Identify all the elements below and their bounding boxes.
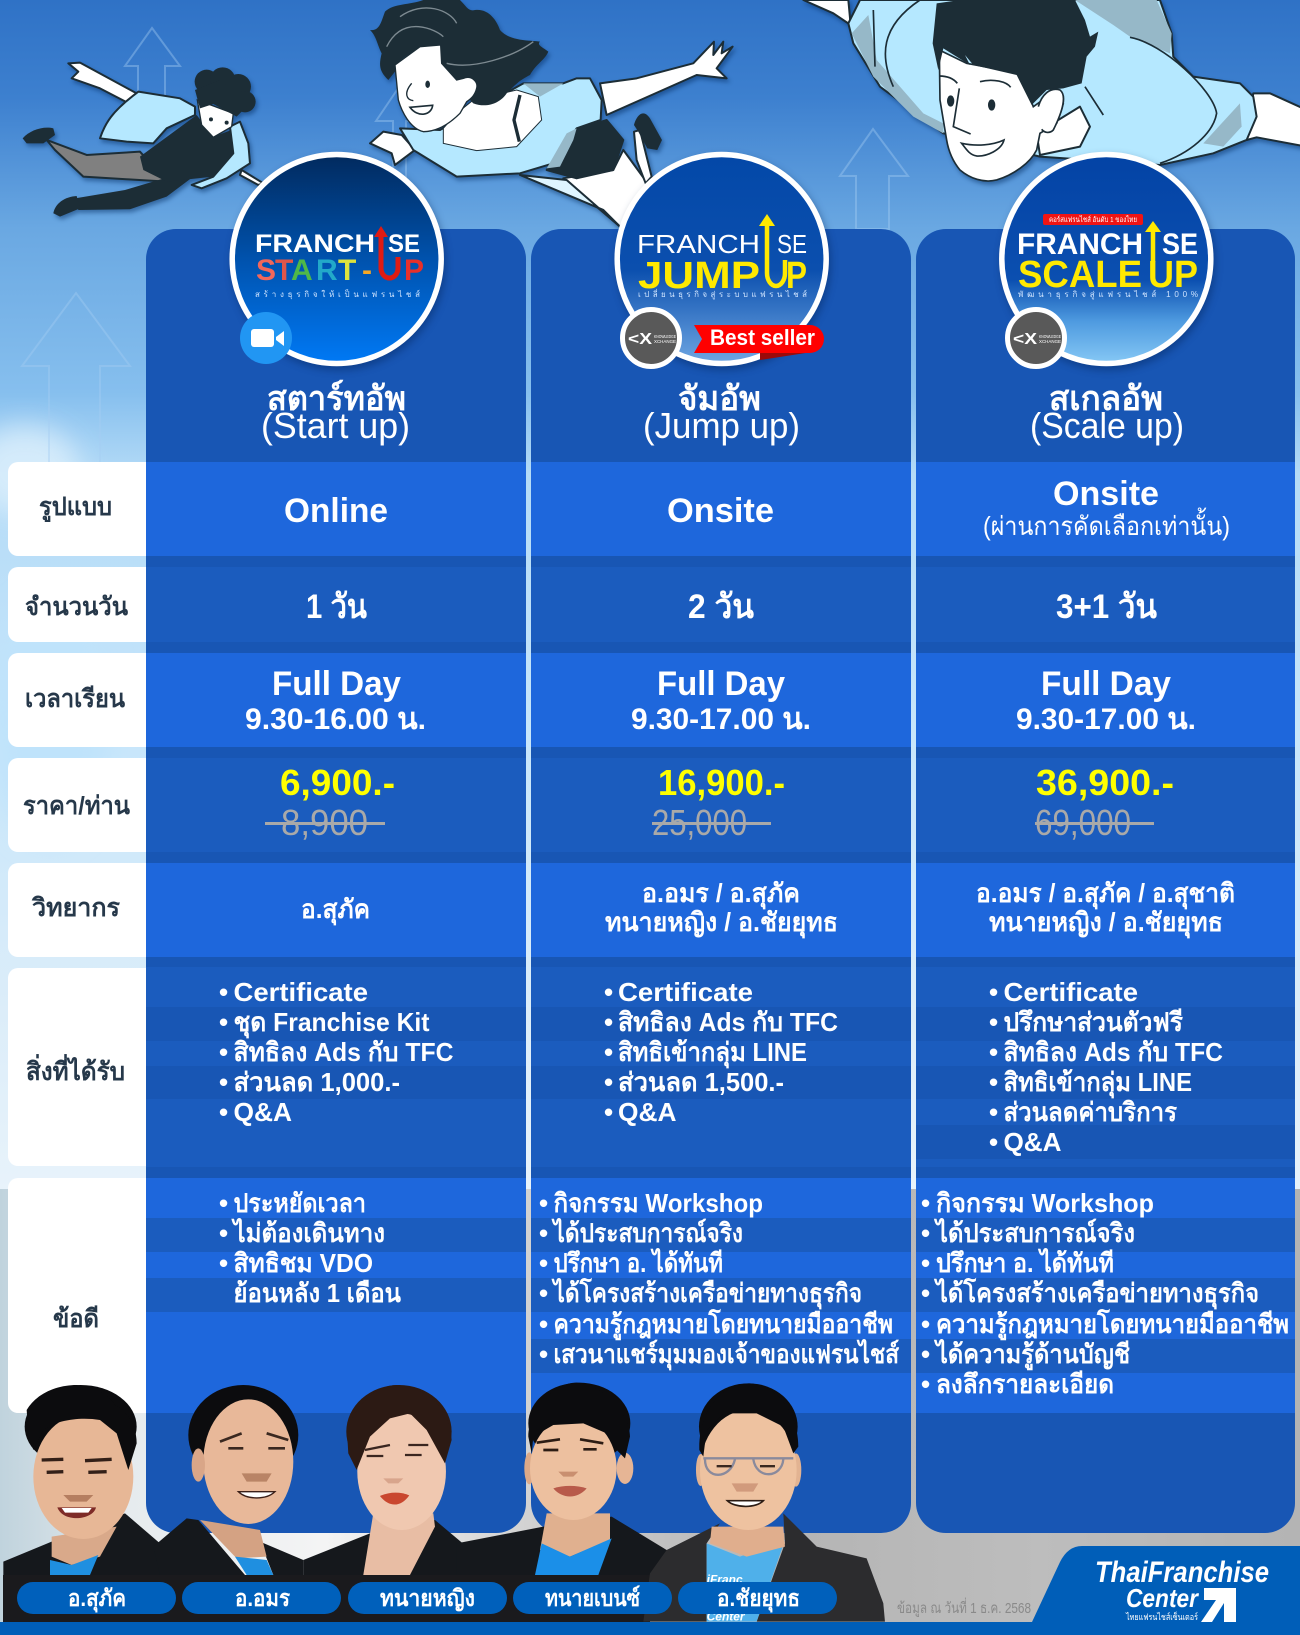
icon: video camera bbox=[240, 312, 292, 364]
list: benefits start up: Certificate bbox=[234, 977, 368, 1007]
list: advantages jump up: กิจกรรม Workshop bbox=[554, 1188, 763, 1218]
list: benefits scale up: สิทธิลง Ads กับ TFC bbox=[1004, 1037, 1223, 1067]
data date note: ข้อมูล ณ วันที่ 1 ธ.ค. 2568 bbox=[897, 1597, 1031, 1617]
portrait: a. supakit bbox=[3, 1385, 175, 1575]
list: advantages jump up: ได้โครงสร้างเครือข่ายทางธุรกิจ bbox=[551, 1277, 862, 1310]
list: advantages start up: ประหยัดเวลา bbox=[234, 1188, 366, 1218]
portrait: a. chaiyut bbox=[643, 1383, 885, 1624]
list: benefits start up: • bbox=[219, 1067, 228, 1097]
cell: price scale up: 69,000 bbox=[1035, 802, 1131, 843]
list: advantages jump up: ปรึกษา อ. ได้ทันที bbox=[554, 1247, 723, 1278]
cell: time start up: Full Day bbox=[272, 665, 401, 703]
list: advantages scale up: กิจกรรม Workshop bbox=[936, 1188, 1154, 1218]
name pill: a. chaiyut: อ.ชัยยุทธ bbox=[717, 1585, 800, 1613]
list: benefits start up: Q&A bbox=[234, 1097, 292, 1127]
row label: study time bbox=[8, 653, 146, 747]
badge: franchise start-up logo bbox=[232, 154, 441, 364]
background arrow: center right bbox=[840, 129, 908, 229]
list: benefits start up bbox=[219, 977, 454, 1127]
list: advantages scale up: • bbox=[921, 1369, 930, 1399]
list: advantages start up: ย้อนหลัง 1 เดือน bbox=[234, 1278, 401, 1308]
icon: knowledge exchange badge for jump up: KNOWLEDGE bbox=[654, 334, 676, 339]
cell: speakers start up: อ.สุภัค bbox=[301, 894, 370, 926]
cell: time scale up: Full Day bbox=[1041, 665, 1171, 703]
cell: price jump up: 25,000 bbox=[652, 802, 747, 843]
heading: start up bbox=[261, 379, 410, 446]
row label: advantages bbox=[8, 1178, 146, 1413]
icon: knowledge exchange badge for scale up: <X bbox=[1013, 331, 1037, 348]
row label: advantages: ข้อดี bbox=[53, 1305, 99, 1333]
cell: speakers jump up bbox=[605, 878, 838, 939]
badge: franchise scale up logo: UP bbox=[1148, 254, 1198, 296]
portrait: a. chaiyut: Center bbox=[707, 1610, 746, 1624]
heading: start up: สตาร์ทอัพ bbox=[267, 379, 406, 418]
list: benefits start up: • bbox=[219, 1007, 228, 1037]
cell: time jump up bbox=[631, 665, 811, 736]
cell: speakers scale up: อ.อมร / อ.สุภัค / อ.สุชาติ bbox=[976, 878, 1235, 910]
badge: franchise scale up logo: SE bbox=[1162, 228, 1198, 261]
icon: knowledge exchange badge for scale up: KNOWLEDGE bbox=[1039, 334, 1061, 339]
cell: speakers scale up bbox=[976, 878, 1235, 939]
list: benefits start up: สิทธิลง Ads กับ TFC bbox=[234, 1037, 454, 1067]
list: advantages start up: สิทธิชม VDO bbox=[234, 1248, 373, 1278]
badge: franchise scale up logo: คอร์สแฟรนไชส์ อันดับ 1 ของไทย bbox=[1049, 215, 1137, 224]
row label: price: ราคา/ท่าน bbox=[23, 792, 130, 820]
list: advantages scale up: • bbox=[921, 1339, 930, 1369]
row label: study time: เวลาเรียน bbox=[25, 685, 125, 713]
cell: price start up bbox=[265, 762, 395, 843]
list: advantages scale up: ลงลึกรายละเอียด bbox=[936, 1369, 1114, 1399]
list: advantages jump up: ได้ประสบการณ์จริง bbox=[551, 1217, 743, 1248]
panel: column scale up bbox=[916, 229, 1296, 1533]
row label: days: จำนวนวัน bbox=[25, 593, 128, 621]
ribbon: best seller: Best seller bbox=[710, 325, 815, 350]
name pill: a. supakit bbox=[17, 1582, 176, 1614]
ribbon: best seller bbox=[694, 325, 824, 360]
list: advantages scale up: ได้โครงสร้างเครือข่ายทางธุรกิจ bbox=[933, 1277, 1259, 1310]
list: benefits start up: • bbox=[219, 1097, 228, 1127]
list: advantages jump up: • bbox=[539, 1188, 548, 1218]
badge: franchise scale up logo bbox=[1002, 154, 1211, 364]
background arrow: behind woman bbox=[376, 90, 420, 200]
cell: price scale up bbox=[1035, 762, 1174, 843]
list: advantages start up: • bbox=[219, 1218, 228, 1248]
name pill: a. chaiyut bbox=[678, 1582, 837, 1614]
cell: time jump up: Full Day bbox=[657, 665, 785, 703]
icon: knowledge exchange badge for scale up bbox=[1008, 310, 1064, 366]
list: benefits scale up: • bbox=[989, 1127, 998, 1157]
name pill: lawyer ben: ทนายเบนซ์ bbox=[545, 1585, 640, 1611]
name pill: lawyer ying: ทนายหญิง bbox=[380, 1585, 475, 1612]
portrait: a. chaiyut: iFranc bbox=[707, 1572, 743, 1586]
cell: price start up: 8,900 bbox=[281, 802, 368, 843]
list: benefits jump up: ส่วนลด 1,500.- bbox=[618, 1067, 784, 1097]
cell: days jump up: 2 วัน bbox=[688, 588, 754, 626]
logo: thai franchise center: ไทยแฟรนไชส์เซ็นเตอร์ bbox=[1125, 1610, 1198, 1622]
list: advantages scale up: • bbox=[921, 1309, 930, 1339]
logo: thai franchise center bbox=[1032, 1546, 1300, 1622]
list: benefits scale up: • bbox=[989, 1007, 998, 1037]
list: advantages scale up: • bbox=[921, 1248, 930, 1278]
list: benefits scale up: ส่วนลดค่าบริการ bbox=[1004, 1097, 1177, 1127]
cell: format online: Online bbox=[284, 492, 388, 530]
heading: scale up bbox=[1030, 380, 1184, 446]
list: advantages jump up: • bbox=[539, 1309, 548, 1339]
cell: format onsite selected only bbox=[983, 475, 1230, 541]
list: benefits scale up: Certificate bbox=[1004, 977, 1138, 1007]
badge: franchise start-up logo: S bbox=[256, 254, 276, 287]
list: benefits jump up: • bbox=[604, 977, 613, 1007]
name pill: a. omorn bbox=[182, 1582, 341, 1614]
list: benefits scale up: • bbox=[989, 1067, 998, 1097]
list: benefits scale up bbox=[989, 977, 1223, 1157]
cell: speakers jump up: อ.อมร / อ.สุภัค bbox=[642, 878, 800, 910]
cell: format onsite selected only: Onsite bbox=[1053, 475, 1159, 513]
heading: jump up bbox=[643, 380, 800, 446]
list: benefits scale up: • bbox=[989, 977, 998, 1007]
cell: speakers scale up: ทนายหญิง / อ.ชัยยุทธ bbox=[989, 907, 1223, 939]
badge: franchise scale up logo: พัฒนาธุรกิจสู่แฟรนไชส์ 100% bbox=[1018, 289, 1198, 300]
row label: format bbox=[8, 462, 146, 556]
list: benefits scale up: สิทธิเข้ากลุ่ม LINE bbox=[1004, 1067, 1192, 1099]
row label: price bbox=[8, 758, 146, 852]
list: benefits jump up: • bbox=[604, 1007, 613, 1037]
list: advantages scale up: ได้ประสบการณ์จริง bbox=[933, 1217, 1135, 1248]
badge: franchise start-up logo: FRANCH bbox=[255, 230, 375, 258]
badge: franchise jump up logo: JUMP bbox=[638, 255, 760, 297]
list: benefits scale up: • bbox=[989, 1037, 998, 1067]
badge: franchise start-up logo: T bbox=[338, 254, 356, 287]
cell: time jump up: 9.30-17.00 น. bbox=[631, 703, 811, 736]
list: advantages start up: • bbox=[219, 1188, 228, 1218]
list: advantages jump up: • bbox=[539, 1218, 548, 1248]
list: benefits start up: ส่วนลด 1,000.- bbox=[234, 1067, 400, 1097]
badge: franchise jump up logo: FRANCH bbox=[637, 229, 760, 259]
list: advantages scale up: • bbox=[921, 1218, 930, 1248]
list: advantages jump up: • bbox=[539, 1248, 548, 1278]
name pill: lawyer ying bbox=[348, 1582, 507, 1614]
badge: franchise start-up logo: A bbox=[291, 254, 313, 287]
list: benefits jump up: • bbox=[604, 1097, 613, 1127]
name pill: lawyer ben bbox=[513, 1582, 672, 1614]
list: benefits start up: ชุด Franchise Kit bbox=[234, 1007, 430, 1039]
list: benefits start up: • bbox=[219, 977, 228, 1007]
portrait: lawyer ying bbox=[303, 1385, 468, 1575]
cell: format onsite: Onsite bbox=[667, 492, 774, 530]
list: advantages scale up: ได้ความรู้ด้านบัญชี bbox=[933, 1338, 1130, 1371]
badge: franchise start-up logo: R bbox=[316, 254, 338, 287]
list: advantages jump up bbox=[539, 1188, 899, 1371]
heading: scale up: (Scale up) bbox=[1030, 405, 1184, 446]
logo: thai franchise center: ThaiFranchise bbox=[1095, 1556, 1269, 1589]
list: advantages jump up: • bbox=[539, 1278, 548, 1308]
cell: speakers jump up: ทนายหญิง / อ.ชัยยุทธ bbox=[605, 907, 838, 939]
list: benefits jump up: สิทธิเข้ากลุ่ม LINE bbox=[618, 1037, 807, 1069]
list: benefits jump up: • bbox=[604, 1037, 613, 1067]
list: benefits jump up: Certificate bbox=[618, 977, 753, 1007]
name bar backdrop bbox=[3, 1575, 650, 1622]
logo: thai franchise center: Center bbox=[1126, 1583, 1200, 1613]
list: advantages jump up: เสวนาแชร์มุมมองเจ้าของแฟรนไชส์ bbox=[554, 1338, 899, 1371]
panel: column jump up bbox=[531, 229, 911, 1533]
badge: franchise scale up logo: FRANCH bbox=[1017, 228, 1143, 261]
row label: speakers: วิทยากร bbox=[31, 894, 121, 922]
cell: time start up: 9.30-16.00 น. bbox=[245, 703, 426, 736]
list: advantages jump up: • bbox=[539, 1339, 548, 1369]
icon: knowledge exchange badge for scale up: XCHANGE bbox=[1039, 339, 1061, 344]
cell: price scale up: 36,900.- bbox=[1036, 762, 1174, 803]
cell: format onsite selected only: (ผ่านการคัดเลือกเท่านั้น) bbox=[983, 507, 1230, 541]
badge: franchise start-up logo: สร้างธุรกิจให้เป็นแฟรนไชส์ bbox=[255, 289, 420, 299]
background arrow: far left bbox=[22, 293, 130, 520]
cell: time start up bbox=[245, 665, 426, 736]
list: benefits jump up: • bbox=[604, 1067, 613, 1097]
row label: format: รูปแบบ bbox=[39, 493, 112, 523]
list: benefits scale up: • bbox=[989, 1097, 998, 1127]
name pill: a. omorn: อ.อมร bbox=[235, 1585, 291, 1611]
character: boy flying bbox=[23, 63, 263, 217]
heading: start up: (Start up) bbox=[261, 405, 410, 446]
heading: jump up: จัมอัพ bbox=[678, 380, 761, 418]
cell: price start up: 6,900.- bbox=[280, 762, 395, 803]
badge: franchise jump up logo: เปลี่ยนธุรกิจสู่ระบบแฟรนไชส์ bbox=[638, 288, 807, 300]
portrait: lawyer ben bbox=[457, 1383, 683, 1575]
row label: benefits bbox=[8, 968, 146, 1166]
list: advantages scale up bbox=[921, 1188, 1289, 1399]
character: large boy flying bbox=[803, 0, 1300, 181]
list: advantages scale up: • bbox=[921, 1278, 930, 1308]
cell: price jump up bbox=[652, 762, 785, 843]
list: benefits jump up: Q&A bbox=[618, 1097, 677, 1127]
list: advantages start up: • bbox=[219, 1248, 228, 1278]
bottom band bbox=[0, 1622, 1300, 1635]
badge: franchise jump up logo: SE bbox=[777, 229, 807, 259]
cell: price jump up: 16,900.- bbox=[658, 762, 785, 803]
heading: jump up: (Jump up) bbox=[643, 405, 800, 446]
badge: franchise start-up logo: P bbox=[404, 254, 424, 287]
list: benefits scale up: Q&A bbox=[1004, 1127, 1062, 1157]
background arrow: upper left bbox=[125, 28, 180, 100]
cell: time scale up bbox=[1016, 665, 1196, 736]
character: woman flying bbox=[370, 0, 733, 227]
list: benefits scale up: ปรึกษาส่วนตัวฟรี bbox=[1004, 1007, 1183, 1037]
badge: franchise jump up logo: P bbox=[786, 255, 807, 297]
cell: days scale up: 3+1 วัน bbox=[1056, 588, 1157, 626]
row label: speakers bbox=[8, 863, 146, 957]
badge: franchise scale up logo: SCALE bbox=[1018, 254, 1142, 296]
badge: franchise jump up logo bbox=[617, 154, 826, 364]
panel: column start up bbox=[146, 229, 526, 1533]
heading: scale up: สเกลอัพ bbox=[1049, 380, 1163, 418]
list: advantages scale up: • bbox=[921, 1188, 930, 1218]
list: benefits start up: • bbox=[219, 1037, 228, 1067]
icon: knowledge exchange badge for jump up: XCHANGE bbox=[654, 339, 676, 344]
icon: knowledge exchange badge for jump up bbox=[622, 310, 680, 366]
list: benefits jump up: สิทธิลง Ads กับ TFC bbox=[618, 1007, 838, 1037]
row label: days bbox=[8, 567, 146, 642]
list: benefits jump up bbox=[604, 977, 838, 1127]
list: advantages scale up: ปรึกษา อ. ได้ทันที bbox=[936, 1247, 1114, 1278]
list: advantages start up bbox=[219, 1188, 401, 1308]
badge: franchise start-up logo: T bbox=[275, 254, 293, 287]
row label: benefits: สิ่งที่ได้รับ bbox=[26, 1054, 125, 1086]
name pill: a. supakit: อ.สุภัค bbox=[68, 1585, 126, 1613]
cell: days start up: 1 วัน bbox=[306, 588, 367, 626]
list: advantages jump up: ความรู้กฎหมายโดยทนายมืออาชีพ bbox=[554, 1308, 893, 1341]
icon: knowledge exchange badge for jump up: <X bbox=[628, 331, 652, 348]
list: advantages start up: ไม่ต้องเดินทาง bbox=[231, 1217, 385, 1248]
badge: franchise start-up logo: SE bbox=[388, 230, 420, 258]
badge: franchise start-up logo: - bbox=[362, 254, 372, 287]
portrait: a. omorn bbox=[153, 1385, 303, 1575]
cell: time scale up: 9.30-17.00 น. bbox=[1016, 703, 1196, 736]
